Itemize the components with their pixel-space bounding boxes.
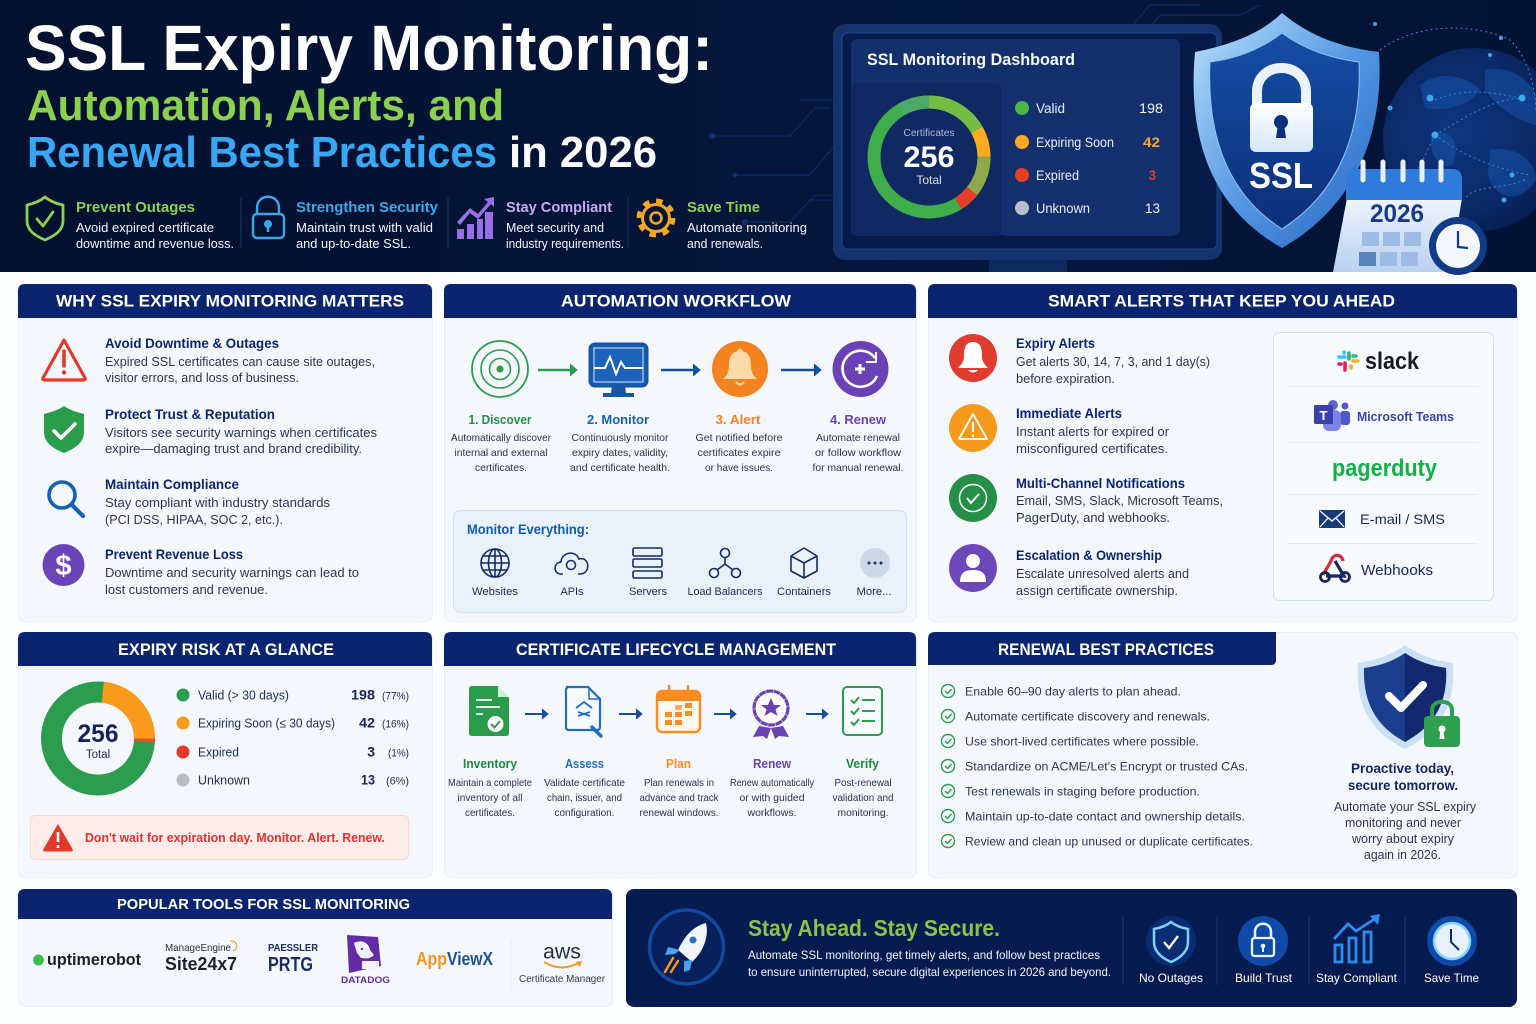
arrow — [525, 709, 548, 719]
step 2 monitor: and certificate health. — [570, 462, 670, 474]
text: multi-channel: PagerDuty, and webhooks. — [1016, 511, 1170, 525]
step 1 discover — [451, 341, 551, 474]
panel: why SSL expiry monitoring matters — [18, 284, 432, 622]
text: multi-channel: Email, SMS, Slack, Microsoft Teams, — [1016, 494, 1223, 508]
text: maintain compliance: (PCI DSS, HIPAA, SOC 2, etc.). — [105, 513, 283, 527]
icon: dollar: $ — [55, 550, 72, 582]
text: avoid downtime: visitor errors, and loss of business. — [105, 371, 299, 385]
logo: site24x7: ManageEngine — [165, 942, 231, 954]
step 2 monitor — [570, 344, 670, 474]
arrow — [619, 709, 642, 719]
checklist: Automate certificate discovery and renewals. — [965, 710, 1210, 724]
legend: 198 — [351, 686, 375, 702]
icon: SSL shield: SSL — [1249, 155, 1313, 196]
badge: build trust — [1235, 916, 1293, 985]
text: maintain compliance — [105, 476, 330, 527]
benefit: strengthen security: Maintain trust with valid — [296, 221, 433, 235]
logo: microsoft teams: T — [1320, 408, 1328, 423]
monitor everything box: APIs — [560, 586, 584, 598]
checklist — [942, 684, 1253, 848]
heading: SMART ALERTS THAT KEEP YOU AHEAD — [1048, 292, 1395, 310]
legend: (16%) — [382, 718, 409, 730]
step 1 discover: certificates. — [475, 462, 527, 474]
dashboard title: SSL Monitoring Dashboard — [867, 50, 1075, 69]
step: assess — [544, 687, 625, 819]
donut chart: 256 — [78, 720, 118, 748]
dashboard legend: Expiring Soon — [1036, 135, 1114, 150]
icon: growth chart — [457, 197, 494, 239]
dashboard donut — [874, 102, 984, 212]
benefit: strengthen security: Strengthen Security — [296, 199, 439, 216]
step: plan: advance and track — [640, 792, 719, 804]
badge: no outages: No Outages — [1139, 971, 1203, 985]
benefit: save time: and renewals. — [687, 237, 763, 251]
arrow — [538, 364, 577, 376]
text: expiry alerts: Get alerts 30, 14, 7, 3, and 1 day(s) — [1016, 355, 1210, 369]
icon: SSL shield — [1194, 13, 1380, 248]
dashboard donut: Certificates — [904, 127, 954, 139]
logo: datadog: DATADOG — [341, 975, 390, 986]
logo: PRTG: PRTG — [268, 954, 313, 976]
logo: aws: aws — [543, 940, 581, 964]
heading — [928, 284, 1517, 318]
text: prevent revenue loss: lost customers and revenue. — [105, 583, 268, 597]
legend: Valid (> 30 days) — [198, 688, 289, 702]
logo: site24x7 — [165, 941, 237, 974]
text: escalation: Escalate unresolved alerts and — [1016, 567, 1189, 581]
checklist: Test renewals in staging before production. — [965, 784, 1200, 798]
icon: shield check — [27, 197, 63, 240]
icon: shield with padlock — [1358, 645, 1460, 749]
text: protect trust: Protect Trust & Reputation — [105, 406, 275, 422]
step 1 discover: 1. Discover — [468, 412, 532, 427]
step 4 renew: for manual renewal. — [812, 462, 904, 474]
dashboard legend: Unknown — [1036, 201, 1090, 216]
step 2 monitor: 2. Monitor — [587, 412, 649, 427]
icon: green check — [949, 474, 997, 522]
legend — [176, 686, 409, 788]
step: verify: Post-renewal — [834, 777, 892, 789]
text: prevent revenue loss — [105, 546, 359, 597]
arrow — [781, 364, 821, 376]
text: proactive: again in 2026. — [1364, 848, 1441, 862]
step: renew: Renew — [753, 756, 792, 771]
title: in 2026 — [509, 128, 657, 177]
donut chart — [52, 692, 144, 785]
monitor everything box: Load Balancers — [688, 586, 763, 598]
legend: 42 — [359, 714, 375, 730]
text: stay ahead — [748, 915, 1111, 979]
text: protect trust: expire—damaging trust and brand credibility. — [105, 442, 362, 456]
text: expiry alerts: Expiry Alerts — [1016, 335, 1095, 351]
badge: no outages — [1139, 916, 1203, 985]
title: Automation, Alerts, and — [27, 81, 504, 130]
step: renew — [730, 691, 815, 819]
icon: gear — [639, 201, 673, 235]
heading — [444, 632, 916, 666]
checklist: Use short-lived certificates where possible. — [965, 734, 1199, 748]
step: inventory: inventory of all — [458, 792, 522, 804]
step 4 renew: 4. Renew — [830, 412, 887, 427]
heading: AUTOMATION WORKFLOW — [561, 292, 792, 310]
monitor everything box: More... — [856, 586, 892, 598]
logo: datadog — [341, 935, 390, 986]
icon and label: email: E-mail / SMS — [1360, 511, 1445, 527]
monitor everything box: Servers — [629, 586, 667, 598]
icon: containers — [791, 548, 817, 578]
step: assess: Assess — [565, 756, 604, 771]
step 3 alert: certificates expire — [698, 447, 781, 459]
icon: 2026 calendar: 2026 — [1370, 200, 1424, 228]
legend: Expiring Soon (≤ 30 days) — [198, 716, 335, 730]
arrow — [661, 364, 700, 376]
text: proactive: secure tomorrow. — [1348, 777, 1458, 793]
benefit: save time: Save Time — [687, 199, 760, 216]
text: stay ahead: to ensure uninterrupted, secure digital experiences in 2026 and beyond. — [748, 965, 1111, 979]
icon: load balancers — [710, 548, 740, 578]
step 2 monitor: expiry dates, validity, — [572, 447, 668, 459]
icon: APIs cloud — [555, 553, 588, 574]
step: plan: Plan renewals in — [644, 777, 714, 789]
text: escalation: Escalation & Ownership — [1016, 547, 1162, 563]
icon: magnifier — [49, 482, 83, 516]
icon and label: webhooks — [1320, 555, 1433, 582]
text: immediate alerts: misconfigured certificates. — [1016, 442, 1168, 456]
checklist: Enable 60–90 day alerts to plan ahead. — [965, 684, 1181, 698]
icon and label: email — [1319, 510, 1445, 528]
step 2 monitor: Continuously monitor — [572, 432, 669, 444]
panel: certificate lifecycle — [444, 632, 916, 878]
logo: uptimerobot: uptimerobot — [47, 950, 141, 969]
icon and label: webhooks: Webhooks — [1361, 563, 1433, 579]
badge: build trust: Build Trust — [1235, 971, 1293, 985]
icon: padlock — [253, 197, 284, 238]
dashboard legend: 42 — [1143, 135, 1160, 150]
text: avoid downtime: Avoid Downtime & Outages — [105, 335, 279, 351]
benefit: save time — [639, 199, 807, 251]
text: proactive: worry about expiry — [1351, 832, 1455, 846]
panel: expiry risk at a glance — [18, 632, 432, 878]
heading — [928, 632, 1276, 665]
logo: microsoft teams: Microsoft Teams — [1357, 409, 1454, 424]
step: renew: Renew automatically — [730, 777, 815, 789]
panel: smart alerts — [928, 284, 1518, 622]
text: stay ahead: Automate SSL monitoring, get timely alerts, and follow best practices — [748, 948, 1100, 962]
monitor everything box: Monitor Everything: — [467, 522, 589, 537]
title — [25, 12, 713, 177]
title: Renewal Best Practices — [27, 128, 497, 177]
icon: orange warning — [949, 404, 997, 452]
logo: PRTG: PAESSLER — [268, 943, 319, 954]
benefit: strengthen security: and up-to-date SSL. — [296, 237, 411, 251]
heading — [18, 284, 432, 318]
icon: red bell — [949, 334, 997, 382]
logo: PRTG — [268, 943, 319, 976]
step 4 renew: or follow workflow — [815, 447, 901, 459]
text: protect trust: Visitors see security warnings when certificates — [105, 426, 377, 440]
step: verify: monitoring. — [838, 807, 888, 819]
checklist: Review and clean up unused or duplicate certificates. — [965, 834, 1253, 848]
dashboard donut: Total — [916, 173, 942, 187]
step: plan: renewal windows. — [640, 807, 718, 819]
checklist: Standardize on ACME/Let's Encrypt or trusted CAs. — [965, 760, 1248, 774]
dashboard legend: Expired — [1036, 168, 1079, 183]
title: SSL Expiry Monitoring: — [25, 12, 713, 84]
icon: purple user — [949, 544, 997, 592]
channels box — [1274, 332, 1494, 600]
text: immediate alerts: Instant alerts for expired or — [1016, 425, 1169, 439]
heading — [18, 889, 612, 919]
icon: more — [860, 548, 890, 578]
panel: popular tools — [18, 889, 612, 1006]
step: assess: chain, issuer, and — [547, 792, 622, 804]
step 1 discover: Automatically discover — [451, 432, 551, 444]
heading — [444, 284, 916, 318]
text: proactive: Proactive today, — [1351, 760, 1454, 776]
benefit: stay compliant — [457, 197, 624, 251]
step: verify: Verify — [846, 756, 880, 771]
heading: WHY SSL EXPIRY MONITORING MATTERS — [56, 292, 404, 310]
text: multi-channel — [1016, 475, 1223, 525]
benefit: prevent outages — [27, 197, 234, 251]
text: prevent revenue loss: Downtime and security warnings can lead to — [105, 566, 359, 580]
monitor everything box — [454, 510, 906, 612]
badge: save time — [1424, 916, 1479, 985]
legend: 13 — [361, 772, 375, 788]
dashboard legend: 13 — [1145, 201, 1160, 216]
text: avoid downtime: Expired SSL certificates can cause site outages, — [105, 355, 375, 369]
text: stay ahead: Stay Ahead. Stay Secure. — [748, 915, 1000, 941]
text: expiry alerts — [1016, 335, 1210, 386]
step: assess: Validate certificate — [544, 777, 625, 789]
icon: dollar — [42, 544, 84, 586]
text: proactive: Automate your SSL expiry — [1334, 800, 1477, 814]
step 1 discover: internal and external — [454, 447, 548, 459]
step: inventory: certificates. — [465, 807, 515, 819]
icon: warning triangle — [43, 340, 85, 380]
benefit: stay compliant: Stay Compliant — [506, 199, 612, 216]
panel: renewal best practices — [928, 632, 1518, 878]
step 4 renew — [812, 341, 904, 474]
benefit: save time: Automate monitoring — [687, 221, 807, 235]
callout: Don't wait for expiration day. Monitor. Alert. Renew. — [85, 830, 385, 845]
benefit: prevent outages: downtime and revenue loss. — [76, 237, 234, 251]
step: verify — [832, 687, 894, 819]
illustration: globe — [1373, 22, 1536, 232]
dashboard legend: 3 — [1148, 168, 1156, 183]
text: maintain compliance: Stay compliant with industry standards — [105, 496, 330, 510]
legend: (77%) — [382, 690, 409, 702]
step 3 alert — [696, 341, 783, 474]
badge: save time: Save Time — [1424, 971, 1479, 985]
step: plan: Plan — [666, 756, 691, 771]
panel: stay ahead banner — [626, 889, 1517, 1007]
callout — [30, 816, 408, 860]
icon: rocket — [650, 910, 724, 984]
step 3 alert: 3. Alert — [716, 412, 761, 427]
benefit: prevent outages: Avoid expired certificate — [76, 221, 214, 235]
step: inventory — [448, 686, 532, 819]
heading — [18, 632, 432, 666]
text: multi-channel: Multi-Channel Notifications — [1016, 475, 1185, 491]
step 4 renew: Automate renewal — [816, 432, 900, 444]
step 3 alert: Get notified before — [696, 432, 783, 444]
step: assess: configuration. — [554, 807, 614, 819]
legend: Expired — [198, 746, 239, 760]
benefit: stay compliant: industry requirements. — [506, 237, 624, 251]
logo: appviewx: ViewX — [447, 949, 493, 969]
benefit: strengthen security — [253, 197, 439, 251]
monitor everything box: Containers — [777, 586, 831, 598]
step: renew: workflows. — [747, 807, 796, 819]
heading: EXPIRY RISK AT A GLANCE — [118, 640, 334, 659]
checklist: Maintain up-to-date contact and ownership details. — [965, 810, 1245, 824]
donut chart: Total — [86, 749, 110, 761]
logo: pagerduty: pagerduty — [1332, 455, 1438, 482]
heading: RENEWAL BEST PRACTICES — [998, 640, 1214, 659]
monitor everything box: Websites — [472, 586, 519, 598]
text: prevent revenue loss: Prevent Revenue Loss — [105, 546, 243, 562]
legend: (1%) — [388, 748, 409, 760]
arrow — [714, 709, 736, 719]
text: expiry alerts: before expiration. — [1016, 372, 1115, 386]
arrow — [806, 709, 828, 719]
logo: aws — [519, 940, 606, 985]
legend: Unknown — [198, 774, 250, 788]
benefit: stay compliant: Meet security and — [506, 221, 604, 235]
step: inventory: Inventory — [463, 756, 518, 771]
legend: 3 — [367, 744, 375, 760]
heading: POPULAR TOOLS FOR SSL MONITORING — [117, 896, 410, 913]
benefit: prevent outages: Prevent Outages — [76, 199, 195, 216]
step: renew: or with guided — [740, 792, 805, 804]
legend: (6%) — [386, 776, 409, 788]
logo: slack — [1339, 348, 1420, 375]
text: proactive — [1334, 760, 1477, 862]
icon: 2026 calendar — [1333, 162, 1487, 275]
logo: aws: Certificate Manager — [519, 974, 606, 985]
text: immediate alerts — [1016, 405, 1169, 456]
text: immediate alerts: Immediate Alerts — [1016, 405, 1122, 421]
text: maintain compliance: Maintain Compliance — [105, 476, 239, 492]
text: proactive: monitoring and never — [1345, 816, 1461, 830]
logo: appviewx: App — [416, 949, 447, 969]
step: verify: validation and — [832, 792, 894, 804]
text: escalation — [1016, 547, 1189, 598]
dashboard monitor — [833, 24, 1222, 272]
step: plan — [640, 686, 719, 819]
logo: microsoft teams — [1314, 400, 1454, 431]
header banner — [0, 0, 1536, 275]
heading: CERTIFICATE LIFECYCLE MANAGEMENT — [516, 640, 837, 659]
dashboard legend: 198 — [1139, 101, 1163, 116]
badge: stay compliant — [1316, 914, 1398, 985]
icon: green shield — [44, 406, 84, 453]
step: inventory: Maintain a complete — [448, 777, 532, 789]
dashboard legend — [1015, 101, 1163, 216]
dashboard donut: 256 — [904, 141, 954, 174]
logo: site24x7: Site24x7 — [165, 953, 237, 974]
logo: appviewx — [416, 949, 493, 969]
panel: automation workflow — [444, 284, 916, 622]
badge: stay compliant: Stay Compliant — [1316, 971, 1398, 985]
logo: slack: slack — [1365, 348, 1420, 375]
text: escalation: assign certificate ownership. — [1016, 584, 1178, 598]
text: avoid downtime — [105, 335, 375, 385]
text: protect trust — [105, 406, 377, 456]
step 3 alert: or have issues. — [705, 462, 773, 474]
icon: servers — [633, 548, 662, 578]
icon: websites — [481, 549, 509, 577]
dashboard legend: Valid — [1036, 101, 1065, 116]
